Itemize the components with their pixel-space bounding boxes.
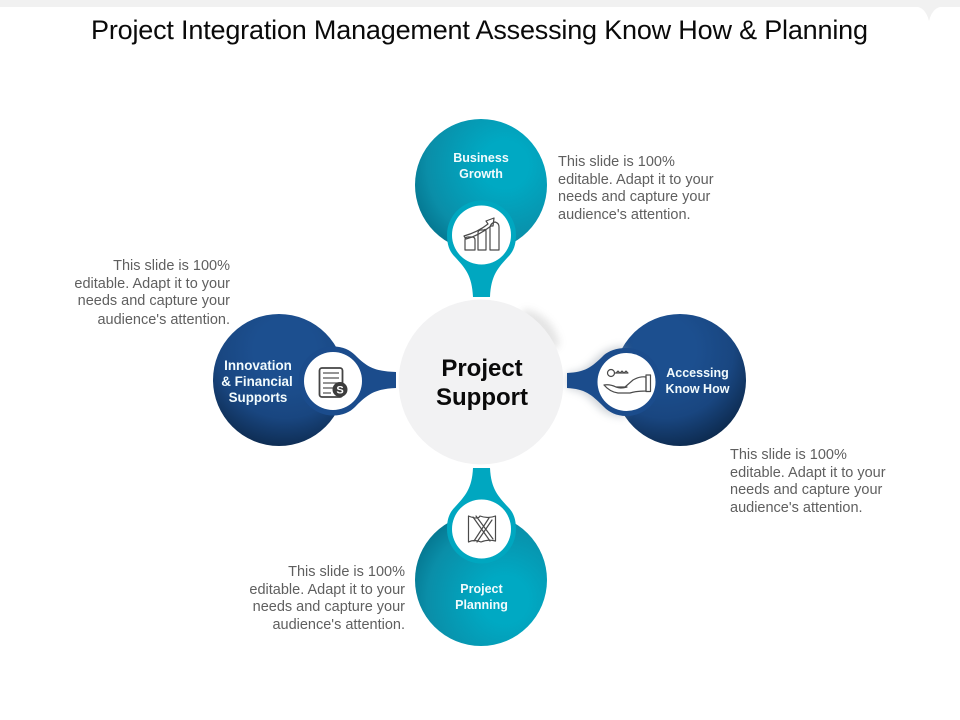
top label: Growth [459,167,503,181]
top header strip [0,0,960,21]
bottom circle [415,514,547,646]
text block: business growth: editable. Adapt it to your [558,172,714,188]
top icon disc [452,206,511,264]
text block: innovation: audience's attention. [97,312,230,328]
text block: innovation: editable. Adapt it to your [74,276,230,292]
text block: business growth: This slide is 100% [558,154,675,170]
left icon disc [304,352,362,410]
panel: project planning [415,468,547,646]
left label: Supports [229,390,287,405]
panel: business growth [415,119,547,297]
text block: accessing know how: editable. Adapt it to your [730,465,886,481]
top label: Business [453,151,509,165]
hub circle [398,300,564,464]
panel: project support hub [398,300,564,464]
hub shadow [520,309,560,350]
right label: Know How [666,382,730,396]
text block: accessing know how: audience's attention. [730,500,863,516]
left label: & Financial [221,374,293,389]
icon: hand holding key [604,370,650,393]
icon: rising bar chart [464,218,499,250]
right circle [614,314,746,446]
hub label: Support [436,384,528,411]
text block: accessing know how: This slide is 100% [730,447,847,463]
left circle [213,314,345,446]
text block: accessing know how: needs and capture your [730,482,883,498]
right icon disc [598,353,656,411]
text block: project planning: audience's attention. [272,617,405,633]
top circle [415,119,547,251]
icon: document with dollar badge: S [336,384,344,396]
left label: Innovation [224,358,292,373]
bottom icon disc [452,500,511,558]
text block: business growth: audience's attention. [558,207,691,223]
text block: innovation: This slide is 100% [113,258,230,274]
bottom label: Project [460,582,504,596]
top teardrop connector [447,201,516,297]
bottom teardrop connector [447,468,516,564]
text block: project planning: This slide is 100% [288,564,405,580]
icon: document with dollar badge [320,368,348,397]
icon: map with crossed tools [468,516,496,542]
right label: Accessing [666,366,729,380]
panel: accessing know how [567,314,746,446]
text block: business growth: needs and capture your [558,189,711,205]
right connector shadow [567,346,626,417]
title: Project Integration Management Assessing Know How & Planning [91,15,868,45]
hub label: Project [441,355,523,382]
text block: innovation: needs and capture your [78,293,230,309]
text block: project planning: needs and capture your [253,599,405,615]
text block: project planning: editable. Adapt it to your [249,582,405,598]
bottom label: Planning [455,598,508,612]
panel: innovation and financial supports [213,314,396,446]
right teardrop connector [567,348,660,416]
left teardrop connector [298,346,396,416]
